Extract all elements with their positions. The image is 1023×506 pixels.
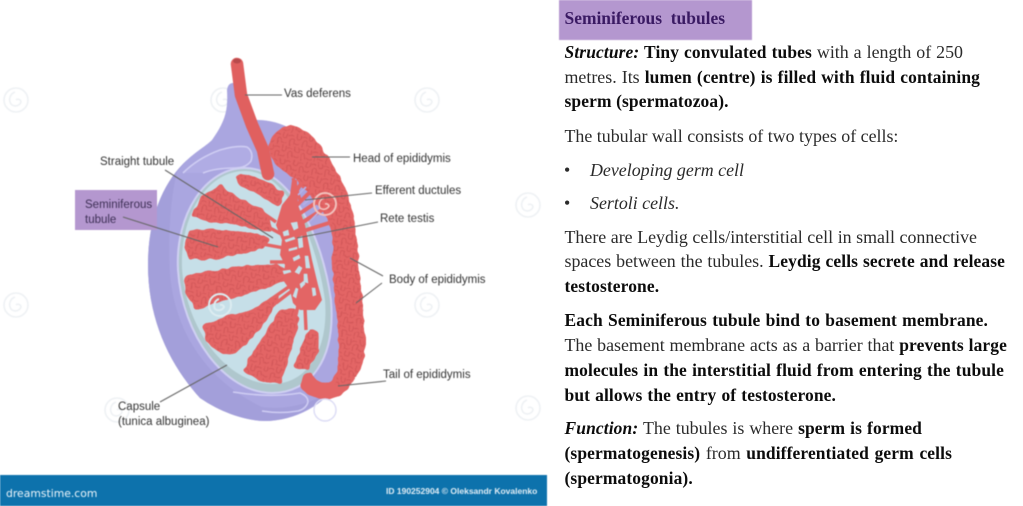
- basement membrane paragraph: The basement membrane acts as a barrier that prevents large: [564, 335, 1007, 355]
- Leydig cells paragraph: There are Leydig cells/interstitial cell in small connective: [564, 227, 977, 247]
- leader lines: [123, 95, 386, 402]
- label: head of epididymis: Head of epididymis: [353, 153, 451, 165]
- rete testis: [260, 178, 322, 330]
- label: straight tubule: Straight tubule: [100, 156, 174, 168]
- label: rete testis: Rete testis: [380, 213, 435, 225]
- footer logo: dreamstime.com: [6, 487, 97, 500]
- seminiferous tubule lobes: [186, 176, 317, 382]
- seminiferous tubule highlight box: [75, 190, 157, 230]
- label: capsule: Capsule: [118, 401, 160, 413]
- label: seminiferous tubule: tubule: [85, 214, 116, 226]
- sac fold bottom: [233, 392, 308, 412]
- label: capsule: (tunica albuginea): [118, 416, 210, 428]
- function paragraph: [564, 418, 952, 488]
- cell type list: •: [564, 193, 570, 213]
- testis body oval: [178, 168, 332, 393]
- basement membrane paragraph: molecules in the interstitial fluid from entering the tubule: [564, 360, 1004, 380]
- Leydig cells paragraph: testosterone.: [564, 276, 659, 296]
- structure paragraph: sperm (spermatozoa).: [564, 91, 729, 111]
- label: seminiferous tubule: Seminiferous: [85, 199, 152, 211]
- cell type list: Developing germ cell: [590, 160, 744, 180]
- label: tail of epididymis: Tail of epididymis: [383, 369, 471, 381]
- basement membrane paragraph: but allows the entry of testosterone.: [564, 385, 836, 405]
- label: vas deferens: Vas deferens: [284, 88, 351, 100]
- basement membrane paragraph: [564, 310, 1007, 405]
- capsule outer sac: [148, 83, 347, 421]
- heading background: [559, 0, 752, 40]
- function paragraph: Function: The tubules is where sperm is formed: [564, 418, 922, 438]
- label: efferent ductules: Efferent ductules: [375, 185, 461, 197]
- function paragraph: (spermatogonia).: [564, 468, 693, 488]
- structure paragraph: [564, 42, 980, 111]
- spiral watermark on epididymis: [314, 193, 336, 215]
- cell type list: [564, 160, 744, 213]
- vas deferens: [233, 58, 268, 174]
- epididymis: head, body and tail: [270, 127, 364, 398]
- cell type list: Sertoli cells.: [590, 193, 679, 213]
- structure paragraph: Structure: Tiny convulated tubes with a length of 250: [564, 42, 963, 62]
- cell type list: •: [564, 160, 570, 180]
- sac fold top: [183, 146, 252, 173]
- basement membrane paragraph: Each Seminiferous tubule bind to basement membrane.: [564, 310, 988, 330]
- spiral watermarks on the diagram: [209, 294, 336, 421]
- label: body of epididymis: Body of epididymis: [389, 274, 486, 286]
- Leydig cells paragraph: [564, 227, 1005, 296]
- footer credit: ID 190252904 © Oleksandr Kovalenko: [386, 486, 537, 496]
- watermarks: [4, 88, 540, 422]
- structure paragraph: metres. Its lumen (centre) is filled with fluid containing: [564, 67, 980, 87]
- footer bar: [0, 475, 547, 506]
- Leydig cells paragraph: spaces between the tubules. Leydig cells secrete and release: [564, 251, 1005, 271]
- efferent ductules: [294, 182, 332, 232]
- function paragraph: (spermatogenesis) from undifferentiated germ cells: [564, 443, 952, 463]
- heading: Seminiferous tubules: [564, 8, 725, 28]
- tubular wall sentence: The tubular wall consists of two types of cells:: [564, 126, 898, 146]
- capsule shading: [148, 160, 332, 421]
